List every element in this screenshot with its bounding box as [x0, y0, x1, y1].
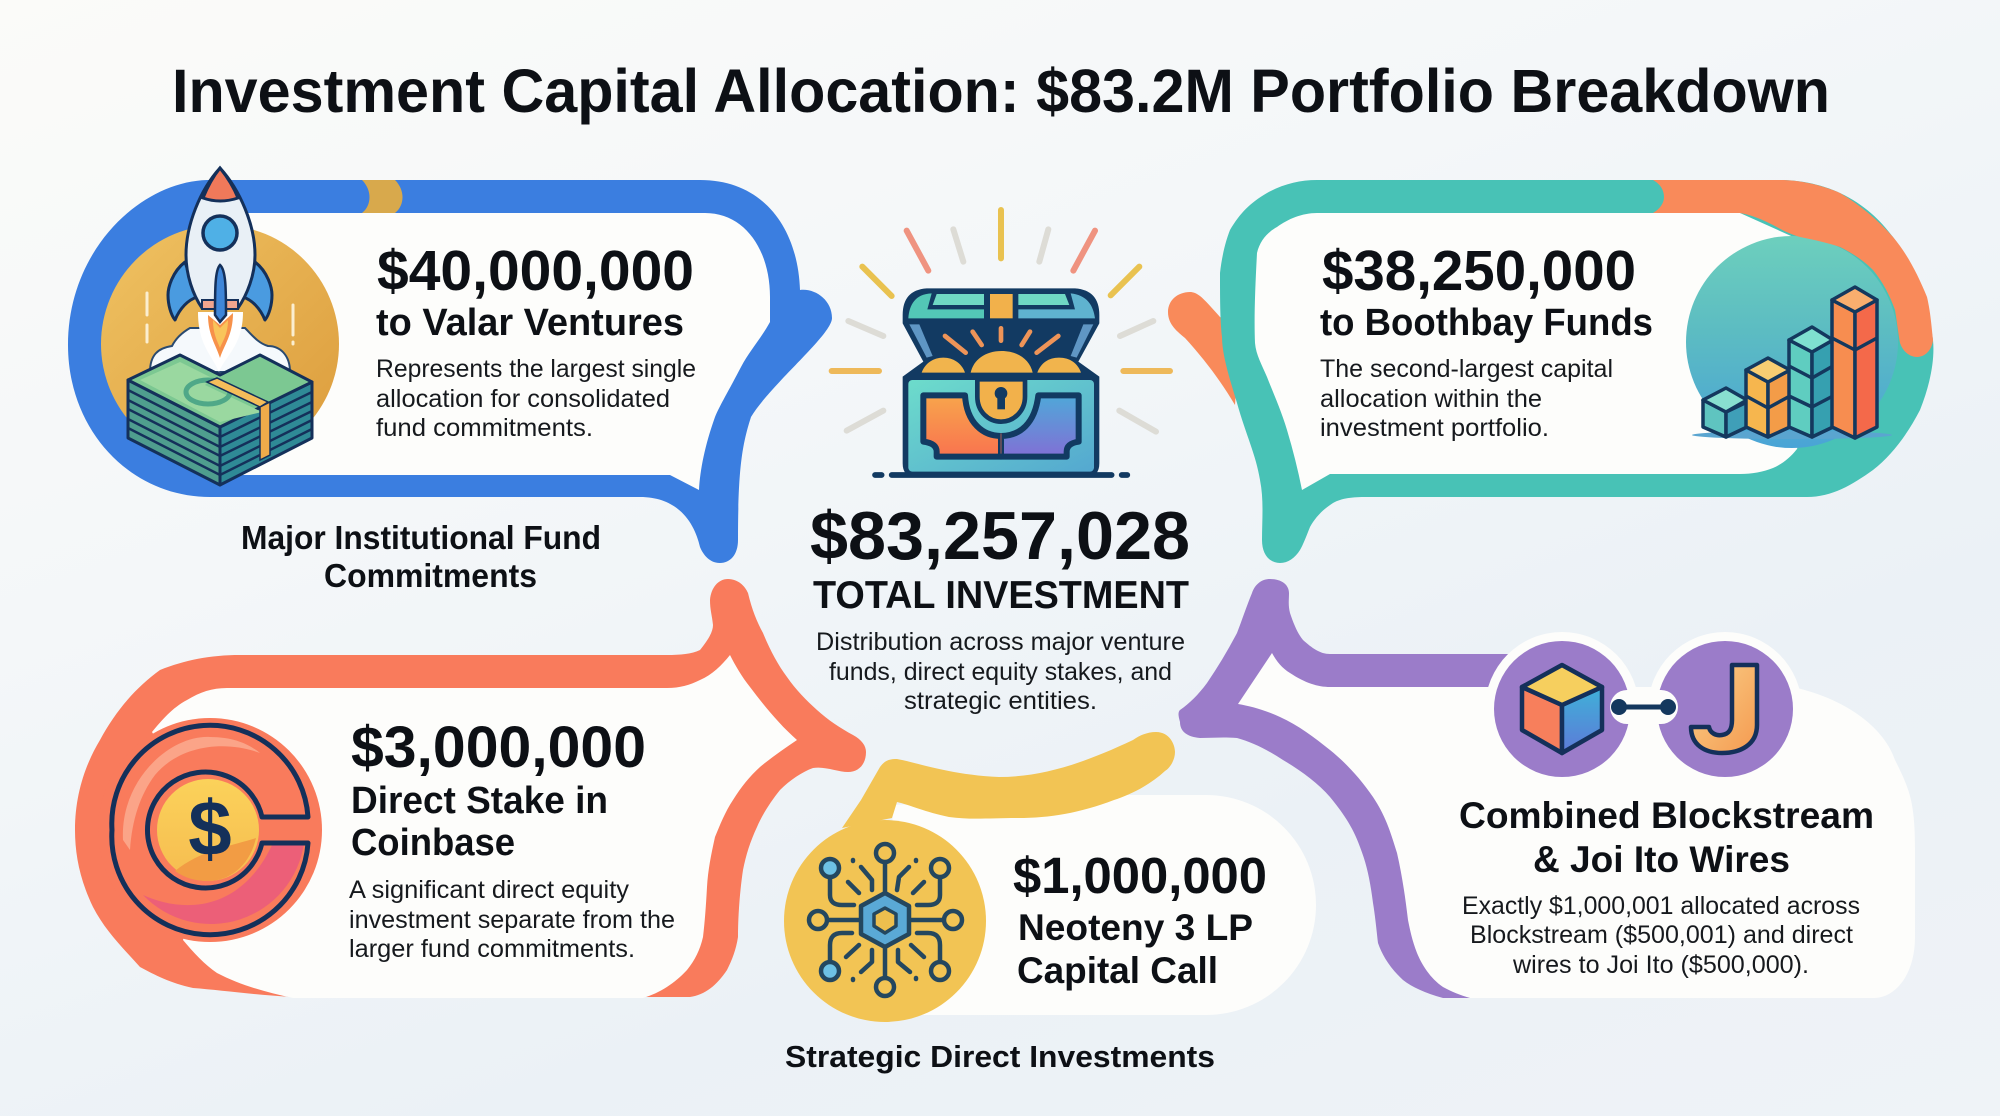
- icon: teal gradient disc: [1686, 236, 1898, 448]
- description: Represents the largest single: [376, 355, 696, 383]
- recipient: Capital Call: [1017, 950, 1218, 991]
- description: Exactly $1,000,001 allocated across: [1462, 892, 1860, 920]
- total description: funds, direct equity stakes, and: [829, 658, 1172, 686]
- orange frame arc: [1653, 180, 1933, 357]
- chest body and lid: [875, 288, 1127, 477]
- icon: coin logo: $: [188, 784, 232, 872]
- white pill: [892, 795, 1316, 1015]
- description: [376, 355, 696, 442]
- description: Blockstream ($500,001) and direct: [1470, 921, 1853, 949]
- burst rays: [832, 210, 1170, 432]
- icon: rising 3D bars: [1692, 287, 1892, 439]
- recipient: [351, 780, 608, 864]
- icon: coin logo: [98, 718, 322, 942]
- description: larger fund commitments.: [349, 935, 635, 963]
- coral speech bubble frame: [75, 579, 866, 997]
- gold frame accent: [362, 180, 402, 213]
- panel: Blockstream and Joi Ito callout: [1178, 579, 1915, 998]
- amount: $1,000,000: [1013, 847, 1267, 904]
- description: investment separate from the: [349, 906, 675, 934]
- panel: Boothbay Funds callout: [1168, 180, 1933, 563]
- category label: direct investments: Strategic Direct Investments: [785, 1039, 1215, 1074]
- description: investment portfolio.: [1320, 414, 1549, 442]
- total label: TOTAL INVESTMENT: [813, 574, 1189, 617]
- yellow connector band: [842, 732, 1175, 828]
- recipient: [1017, 907, 1253, 991]
- icon: rocket launching from cash stack: [128, 168, 312, 485]
- heading: & Joi Ito Wires: [1533, 839, 1790, 880]
- heading: Combined Blockstream: [1459, 795, 1874, 836]
- icon: yellow disc: [784, 820, 986, 1022]
- amount: $3,000,000: [351, 715, 646, 780]
- recipient: Direct Stake in: [351, 780, 608, 822]
- category label: institutional funds: Major Institutional Fund: [241, 519, 601, 556]
- icon: circuit hexagon: [809, 844, 962, 996]
- panel: Neoteny 3 callout: [784, 732, 1316, 1022]
- amount: $38,250,000: [1322, 239, 1636, 303]
- central total: [810, 498, 1190, 715]
- amount: $40,000,000: [377, 239, 694, 303]
- description: The second-largest capital: [1320, 355, 1613, 383]
- icon: treasure chest with rays: [832, 210, 1170, 477]
- description: wires to Joi Ito ($500,000).: [1512, 951, 1809, 979]
- description: A significant direct equity: [349, 876, 629, 904]
- icon: blockstream cube and J linked: [1485, 632, 1802, 786]
- total amount: $83,257,028: [810, 498, 1190, 574]
- category label: institutional funds: [241, 519, 601, 594]
- orange left tail: [1168, 292, 1240, 405]
- description: allocation within the: [1320, 385, 1542, 413]
- recipient: Neoteny 3 LP: [1018, 907, 1253, 948]
- description: [1320, 355, 1613, 442]
- bubble interior: [152, 655, 797, 998]
- panel: Valar Ventures callout: [68, 168, 832, 563]
- total description: [816, 628, 1185, 715]
- description: [1462, 892, 1860, 979]
- bubble interior: [1238, 653, 1915, 998]
- heading: [1459, 795, 1874, 880]
- description: allocation for consolidated: [376, 385, 670, 413]
- panel: Coinbase callout: [75, 579, 866, 998]
- title: Investment Capital Allocation: $83.2M Portfolio Breakdown: [172, 57, 1830, 125]
- blue speech bubble frame: [68, 180, 832, 563]
- bubble interior: [1255, 213, 1800, 490]
- recipient: Coinbase: [351, 822, 515, 864]
- description: [349, 876, 675, 963]
- recipient: to Valar Ventures: [376, 302, 684, 344]
- total description: Distribution across major venture: [816, 628, 1185, 656]
- total description: strategic entities.: [904, 687, 1097, 715]
- recipient: to Boothbay Funds: [1320, 302, 1653, 344]
- description: fund commitments.: [376, 414, 593, 442]
- teal speech bubble frame: [1220, 180, 1933, 563]
- category label: institutional funds: Commitments: [324, 557, 537, 594]
- bubble interior: [240, 213, 770, 490]
- icon: gold disc: [101, 225, 339, 463]
- purple speech bubble frame: [1178, 579, 1600, 998]
